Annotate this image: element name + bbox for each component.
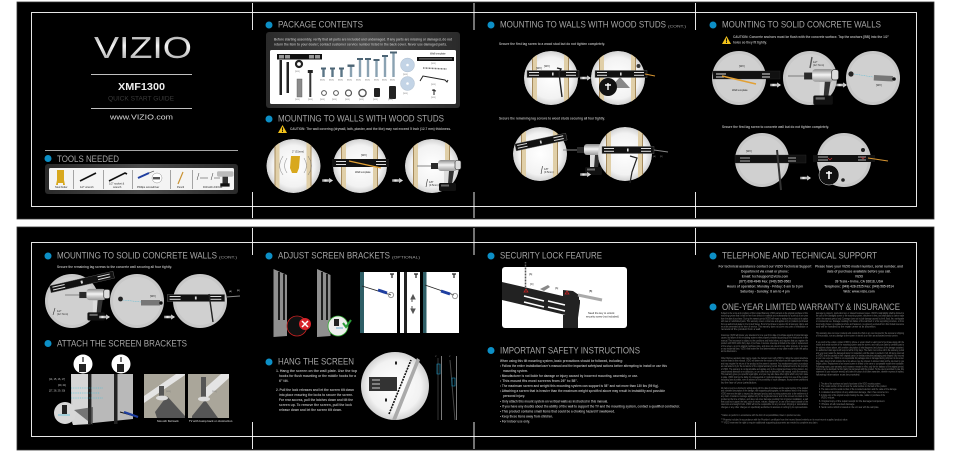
photo: screw bump back: [WX] xyxy=(212,391,217,393)
text: support contact: For technical assistance contact our VIZIO Technical Support xyxy=(719,264,812,268)
cover: model title: QUICK START GUIDE xyxy=(108,96,174,102)
part: wall plate xyxy=(277,54,322,60)
panel: top sheet black background xyxy=(17,2,934,219)
caption: photos: Smooth flat back xyxy=(157,419,179,423)
text: safety list: personal injury. xyxy=(503,394,525,398)
text: warranty left column: product with VIZIO within thirty days of purchase. Insurance coverage is limited to the repair or replacement xyxy=(721,342,808,345)
text: warranty right column: and will be handled by the repair center at its discretion. xyxy=(816,326,876,328)
text: warranty claim list: 8. Serial number which is located on the unit near with the wall plate. xyxy=(819,406,879,409)
heading: concrete cont: MOUNTING TO SOLID CONCRETE WALLS xyxy=(57,251,217,262)
text: support contact: Email: techsupport@vizio.com xyxy=(742,274,788,278)
part labels: [WX] xyxy=(347,80,352,82)
icon: phillips screwdriver xyxy=(138,173,149,178)
parts: spacers xyxy=(374,86,396,99)
text: warranty right column xyxy=(816,312,905,376)
text: warranty footnotes: ** Property included in accordance with the Provider's certificate from the insured based entirely on its most-recent supplied product value. xyxy=(721,418,848,422)
text: warranty left column: with new or refurbished parts. This warranty covers normal use and applies only to products purchased xyxy=(721,320,808,323)
text: support contact xyxy=(719,264,812,294)
text: warranty left column: are warranted only for the remainder of the original warranty period. Parts replaced become the property xyxy=(721,365,809,368)
diagram: security lock: [C] xyxy=(572,295,576,299)
part labels: [WX] xyxy=(356,80,361,82)
part labels: [WX] xyxy=(345,99,350,101)
heading: important safety instructions: IMPORTANT SAFETY INSTRUCTIONS xyxy=(500,346,640,357)
text: hang steps: For rear access, pull the latches down and tilt the xyxy=(279,398,353,402)
text: warranty left column: charges or any other charges not specifically authorized in advance in writing by its representative. xyxy=(721,406,808,409)
text: hang steps: release down and let the screen tilt down. xyxy=(279,408,342,412)
heading: mounting to walls with wood studs cont: (CONT.) xyxy=(668,24,687,28)
instruction: remaining lag screws wood: Secure the remaining lag screws to wood studs securing all four tightly. xyxy=(499,116,605,120)
text: warranty left column: Other: Before a warranty claim can be made, the claimant must notify VIZIO by calling the support telephone xyxy=(721,357,808,360)
step: concrete template: [WX] xyxy=(739,64,745,68)
tool labels: Stud finder xyxy=(55,185,68,189)
arrow xyxy=(99,314,110,320)
text: safety list: mounting system. xyxy=(503,369,528,373)
tool labels: Phillips screwdriver xyxy=(137,185,159,189)
heading: adjust screen brackets: (OPTIONAL) xyxy=(392,255,421,260)
step: locate studs: 2" (51mm) xyxy=(292,150,304,154)
text: warranty left column: and a detailed description of the damage, with supporting photographs, to the address listed in this section. xyxy=(721,390,808,393)
text: support contact: Hours of operation: Monday - Friday: 6 am to 9 pm xyxy=(727,284,803,288)
step: tighten concrete: [A] xyxy=(229,290,232,293)
text: warranty claim list: 4. A detailed description of any additional damage, that it has occurred on. xyxy=(819,391,889,394)
step: first lag screw xyxy=(524,50,579,106)
text: vizio address: Please have your VIZIO model number, serial number, and xyxy=(815,264,903,268)
step: drill remaining concrete: (12.7mm) xyxy=(57,312,68,316)
part labels: [WX] xyxy=(295,71,300,73)
photo: screw flat back xyxy=(144,374,185,418)
text: safety list: • Only attach this mount system on vertical walls as instructed in this manual. xyxy=(500,400,608,404)
step: first lag concrete xyxy=(735,133,806,190)
step: concrete drill: (12.7mm) xyxy=(813,63,824,67)
heading: concrete cont: (CONT.) xyxy=(219,255,238,260)
text: warranty claim list xyxy=(819,382,897,409)
diagram: tilt side view xyxy=(449,356,456,420)
panel: package contents xyxy=(266,32,460,108)
text: hang steps: hooks for flush mounting or the middle hooks for a xyxy=(279,374,356,378)
text: warranty footnotes: * Failure to perform in accordance with the limit of responsibilities; flaws in product service. xyxy=(721,414,801,417)
text: warranty left column: including loss of profits, even if advised of the possibility of such damages, except where prohibited xyxy=(721,379,808,382)
diagram: security lock: Need the key to unlock xyxy=(588,311,615,315)
heading: mounting to walls with wood studs: MOUNTING TO WALLS WITH WOOD STUDS xyxy=(278,114,444,125)
text: warranty left column: manual. This insurance is subject to the conditions and limits below, and requires that you register the xyxy=(721,339,808,342)
text: warranty claim list: 2. The model number of the unit and the serial number on the back of the product. xyxy=(819,385,887,388)
caption: photos xyxy=(157,419,233,423)
diagram: hanging close-up xyxy=(361,352,429,420)
icon: pencil xyxy=(178,172,183,184)
text: warranty right column: the address shown above, with a written description of what happened and photos of the damage sustained. xyxy=(816,346,904,349)
text: warranty right column: to VIZIO shall be packed in their original carton or similar protective packaging and shipped fully insured xyxy=(816,354,904,358)
step: insert anchor 2 xyxy=(110,274,164,328)
text: vizio address xyxy=(815,264,903,294)
panel: tools needed xyxy=(45,164,238,194)
diagram: security lock xyxy=(502,262,627,328)
text: warranty claim list: 3. The name and the serial number of the mounted television and the value of the damage. xyxy=(819,388,897,391)
step: tighten all: [B] xyxy=(660,156,663,158)
tool labels: Drill with drill bits xyxy=(203,185,223,189)
text: warranty left column: of the screen, up to its original purchase price, and does not extend to any other property or persons xyxy=(721,345,809,348)
icon: drill bits xyxy=(197,173,220,180)
tool labels: 1/2" socket & xyxy=(109,182,124,186)
step: first lag screw: [WX] xyxy=(536,66,542,70)
text: warranty claim list: 6. Original copy of the repair receipt for the damaged component. xyxy=(819,400,885,403)
part: lag screw xyxy=(308,70,313,97)
step: wall template: [WX] xyxy=(361,153,367,157)
part: screws strip xyxy=(423,68,447,69)
part labels: [WX] xyxy=(382,80,387,82)
text: warranty left column: of VIZIO. The warranty is not transferable and applies only to the original purchaser of the product. Any xyxy=(721,368,809,371)
step: insert anchor: [WX] xyxy=(876,83,882,87)
text: warranty right column: Claims may be declined if a third party has tampered with the product. To the extent permitted by law, this xyxy=(816,368,905,371)
text: safety list: • The maximum screen and weight this mounting system can support is 58" and not more than 130 lbs (59 Kg). xyxy=(500,384,659,388)
text: vizio address: 39 Tesla • Irvine, CA 92618, USA xyxy=(835,280,884,284)
icon: socket wrench xyxy=(109,173,127,181)
text: warranty right column: statement is your exclusive remedy and takes the place of all other warranties, whether express or implied, xyxy=(816,371,904,374)
part labels: [WX] xyxy=(332,99,337,101)
text: safety list xyxy=(500,359,680,424)
parts: small washers xyxy=(322,89,366,97)
part: wall template xyxy=(417,52,454,61)
text: warranty right column: damage to property, production lost, or related business losses. VIZIO's total liability shall be limited to xyxy=(816,312,904,315)
caution: wall covering: CAUTION: The wall covering (drywall, lath, plaster, and the like) may not exceed 5 Inch (12.7 mm) thickness. xyxy=(290,127,451,131)
step: insert anchor xyxy=(846,51,900,105)
text: warranty left column: from the date of purchase. During the warranty period VIZIO will repair or replace the product at its option xyxy=(721,317,808,320)
tool labels: wrench xyxy=(113,185,122,189)
text: warranty right column: or commercial use. Damage resulting from failure of the wall itself or of its supporting structure, or from xyxy=(816,320,904,323)
part labels: [WX] xyxy=(320,80,325,82)
text: warranty right column: Following repair, your warranty and insurance remain in effect only for the balance of the original period. xyxy=(816,365,904,368)
text: warranty right column: This warranty does not cover products sold outside the USA or any cost incurred for the removal or shipping xyxy=(816,332,904,335)
text: vizio address: Web: www.vizio.com xyxy=(843,290,875,294)
heading: attach the screen brackets: ATTACH THE SCREEN BRACKETS xyxy=(57,338,187,350)
text: warranty left column: All claims must be submitted in writing along with the date of purchase and the serial number of the product xyxy=(721,387,808,390)
text: vizio address: date of purchase available before you call. xyxy=(827,270,891,274)
part: anchor xyxy=(297,79,302,97)
text: warranty left column: that could not support the load, acts of nature, misuse, negligence, or use of the mount outside of the xyxy=(721,400,808,404)
text: warranty claim list: 5. A photo copy of the original receipt showing the date, retailer or purchase of the xyxy=(819,394,885,397)
step: first lag concrete: [WX] xyxy=(746,149,752,153)
cover: website: www.VIZIO.com xyxy=(109,114,173,122)
part labels: [WX] xyxy=(388,99,393,101)
text: warranty right column: An authorized claim agent will respond within thirty days. The claim must arrive within the warranty period xyxy=(816,349,904,352)
step: drill remaining holes xyxy=(513,126,607,182)
diagram: reposition bracket xyxy=(400,272,420,333)
part labels: [WX] xyxy=(359,99,364,101)
text: warranty claim list: 1. The date of the purchase and proof of purchase of the VIZIO mounting system. xyxy=(819,382,881,386)
step: first lag screw: [WX] xyxy=(544,64,550,68)
text: warranty left column: by the law of your jurisdiction. xyxy=(721,381,757,384)
diagram: flush side view: 0" xyxy=(435,356,437,358)
caution: concrete anchors xyxy=(722,35,889,44)
part: washer xyxy=(296,61,302,67)
heading: tools needed: TOOLS NEEDED xyxy=(57,154,119,165)
step: tighten all xyxy=(598,126,668,183)
diagram: remove screw xyxy=(360,272,397,333)
diagram: security lock: [B] xyxy=(589,289,592,293)
text: warranty left column: mounting system that it shall be free from defects in material and workmanship for a period of one year xyxy=(721,315,808,318)
arrow xyxy=(836,82,847,88)
step: drill pilot holes: 1/8" xyxy=(429,180,434,184)
tool labels: Pencil xyxy=(177,185,184,189)
text: support contact: Saturday - Sunday: 8 am to 4 pm xyxy=(740,290,790,294)
part: small key xyxy=(432,89,436,95)
text: support contact: Department via email or phone: xyxy=(741,270,789,274)
text: safety list: • For indoor use only. xyxy=(500,420,530,424)
text: warranty claim list: VIZIO mount. xyxy=(821,396,835,400)
step: drill pilot holes: (3.5mm) xyxy=(429,183,439,187)
arrow xyxy=(580,75,591,81)
text: warranty left column: to state. VIZIO shall not be liable for consequential or incidental damages arising from use of the product xyxy=(721,376,808,379)
part labels: [WX] xyxy=(338,80,343,82)
part: wall template: Wall template xyxy=(430,52,446,56)
part labels: [WX] xyxy=(295,99,300,101)
arrow xyxy=(580,172,591,177)
caution: concrete anchors: holes so they fit tightly. xyxy=(733,40,767,44)
text: warranty left column: or any incidental loss. VIZIO shall make the final determination on any claim made under this policy xyxy=(721,348,809,350)
text: warranty right column: within the warranty period only. Coverage does not include damage caused by theft, flood, fire, earthquake xyxy=(816,317,904,320)
step: tighten concrete xyxy=(167,274,240,328)
cover: VIZIO logo: VIZIO xyxy=(94,30,192,65)
text: warranty right column: Any claim found to fall outside the terms above may be refused. A refused claim will be returned to you xyxy=(816,360,904,363)
arrow xyxy=(770,82,781,88)
cover: model title xyxy=(91,74,192,108)
photo: screw bump back xyxy=(188,374,229,418)
intro text xyxy=(274,38,453,47)
instruction: first lag screw concrete: Secure the first lag screw to concrete wall but do not tighten completely. xyxy=(722,125,829,129)
text: safety list: • If you have any doubts about the ability of the wall to support the TV and the mounting system, contact a qualified contractor. xyxy=(500,404,680,408)
step: level check xyxy=(591,50,655,106)
text: support contact: (877) 698-4946 Fax: (949) 585-9563 xyxy=(739,280,791,284)
text: warranty right column: the cost of the damaged screen or the mounting system, whichever is less, and shall apply to claims made xyxy=(816,315,904,318)
text: safety list: • Manufacturer is not liable for damage or injury caused by incorrect mounting, assembly, or use. xyxy=(500,374,638,378)
text: warranty left column xyxy=(721,312,809,409)
part: screen rails xyxy=(280,60,289,95)
instruction: remaining lag screws concrete: Secure the remaining lag screws to the concrete wall securing all four tightly. xyxy=(57,265,172,269)
step: wall template xyxy=(332,138,389,194)
text: hang steps: 2. Pull the lock releases and let the screen tilt down xyxy=(276,388,354,392)
heading: security lock feature: SECURITY LOCK FEATURE xyxy=(500,251,602,262)
text: warranty left column: number listed in this manual. VIZIO will determine the nature of the failure and the appropriate remedy xyxy=(721,360,809,363)
heading: mounting to walls with wood studs cont: MOUNTING TO WALLS WITH WOOD STUDS xyxy=(500,20,666,30)
diagram: screen back with brackets xyxy=(49,354,138,425)
text: vizio address: VIZIO xyxy=(855,274,864,278)
text: warranty left column: removal of the product from a wall. xyxy=(721,328,761,331)
part labels: [WX] xyxy=(431,97,436,99)
text: warranty left column: rated size and weight limits. VIZIO will not be responsible for any removal, shipping or reinstallation xyxy=(721,403,808,406)
text: warranty left column: at its discretion. xyxy=(721,350,737,353)
icon: 1/2 inch wrench xyxy=(80,173,96,181)
diagram: incorrect bracket position xyxy=(274,269,311,337)
part labels: [WX] xyxy=(403,93,408,95)
step: concrete drill xyxy=(783,51,839,105)
step: locate studs xyxy=(266,138,320,194)
text: warranty right column: freight collect. Replacement of an insured screen is limited to the same or comparable model when available. xyxy=(816,363,904,366)
part labels xyxy=(295,63,436,101)
diagram: correct bracket position xyxy=(317,269,351,337)
text: hang steps: 1. Hang the screen on the wall plate. Use the top xyxy=(276,369,357,373)
diagram: replace screw xyxy=(423,272,459,333)
parts: bolts xyxy=(321,52,397,77)
part labels: [WX] xyxy=(329,80,334,82)
diagram: security lock: security screw (not included) xyxy=(586,314,619,318)
text: warranty footnotes: *** VIZIO reserves the right to require additional supporting documents as needed to complete any claim. xyxy=(721,422,818,424)
step: drill remaining holes: (3.5mm) xyxy=(544,170,554,174)
text: warranty claim list: 7. Photos of all mounted damage. xyxy=(819,403,855,406)
icon: drill xyxy=(217,171,234,187)
text: warranty footnotes xyxy=(721,414,848,424)
icon: stud finder xyxy=(56,170,65,185)
text: warranty left column: Insurance: VIZIO will insure your television for one year from date of purchase against physical damage xyxy=(721,334,808,337)
text: warranty right column: of the product, nor any damage to the screen in transit to or from an authorized service center. xyxy=(816,335,898,338)
text: warranty right column: at your own expense. VIZIO is not responsible for packages lost or damaged during shipment to its center. xyxy=(816,357,904,360)
text: safety list: • This mount fits most screens from 26" to 58". xyxy=(500,379,578,383)
text: warranty left column: from an authorized dealer in the United States. Proof of purchase is required for all warranty claims and xyxy=(721,323,808,326)
text: warranty left column: This warranty gives you specific legal rights, and you may also have other rights which vary from state xyxy=(721,373,808,376)
text: warranty left column: VIZIO reserves the right to inspect the damaged product and mounting system prior to the settlement of xyxy=(721,392,808,395)
arrow xyxy=(164,314,175,320)
parts: large washers xyxy=(400,58,414,90)
text: hang steps: into place ensuring the locks to secure the screen. xyxy=(279,393,353,397)
text: warranty right column: following information must be provided: xyxy=(816,373,860,376)
arrow xyxy=(392,178,403,183)
heading: package contents: PACKAGE CONTENTS xyxy=(278,20,363,30)
heading: telephone and technical support: TELEPHONE AND TECHNICAL SUPPORT xyxy=(722,251,877,262)
part: hanging tool xyxy=(420,76,448,82)
diagram: security lock: [A] xyxy=(529,272,532,276)
arrow xyxy=(800,175,811,181)
part labels: [WX] xyxy=(431,84,436,86)
text: warranty left column: unauthorized alteration or modification, or use other than as directed in this manual, voids the warranty. xyxy=(721,370,808,374)
text: safety list: • Keep these items away from children. xyxy=(500,414,553,418)
step: drill remaining holes: 1/8" xyxy=(544,167,549,171)
text: warranty left column: and may require the return of the product at the owner's expense. Any replacement parts or products xyxy=(721,362,809,365)
heading: mounting to solid concrete walls: MOUNTING TO SOLID CONCRETE WALLS xyxy=(722,20,881,30)
text: safety list: • Follow the entire installation/user's manual and the important safety/and actions before attempting to install or use this xyxy=(500,364,667,368)
part labels: [WX] xyxy=(365,80,370,82)
step: tighten all: [A] xyxy=(653,155,656,158)
text: warranty right column: model and serial number of the mounting system and the screen, and mail your claim by certified post to xyxy=(816,344,904,347)
text: hang steps xyxy=(276,369,357,412)
tool labels: 1/2" wrench xyxy=(80,185,94,189)
text: warranty right column: If you wish to file a claim, contact VIZIO by phone or email. Attach a valid proof of purchase along with the xyxy=(816,341,904,344)
diagram: screen back with brackets: [20, 21] xyxy=(58,384,66,387)
intro text: return the item to your dealer; contact customer service number listed in the back cover. Never use damaged parts. xyxy=(274,43,447,47)
panel: bottom sheet black background xyxy=(17,227,934,450)
text: hang steps: 6" tilt. xyxy=(279,379,289,383)
step: concrete template xyxy=(712,51,780,105)
heading: hang the screen: HANG THE SCREEN xyxy=(278,357,354,368)
part labels: [WX] xyxy=(374,80,379,82)
instruction: first lag screw wood: Secure the first lag screw to a wood stud but do not tighten completely. xyxy=(499,42,605,46)
heading: one-year limited warranty: ONE-YEAR LIMITED WARRANTY & INSURANCE xyxy=(722,302,900,313)
caption: photos: TV with bump back or obstruction xyxy=(189,419,233,423)
step: wall template: Wall template xyxy=(355,170,371,174)
diagram: tilt side view: 6" xyxy=(449,356,451,358)
caution: concrete anchors: CAUTION: Concrete anchors must be flush with the concrete surface. Tap the anchors [BB] into the 1/2" xyxy=(733,35,889,39)
step: concrete template: Wall template xyxy=(732,88,748,92)
step: insert anchor 2: [WX] xyxy=(150,294,156,298)
text: warranty left column: must be presented at the time of service. This warranty does not cover any costs of installation or xyxy=(721,326,808,328)
part labels: [WX] xyxy=(403,74,408,76)
part labels: [WX] xyxy=(390,80,395,82)
arrow xyxy=(322,178,333,183)
step: tighten concrete: [B] xyxy=(237,290,240,292)
text: vizio address: Telephone: (949) 428-2525 Fax: (949) 585-9514 xyxy=(824,284,894,288)
icon: phillips screw inset xyxy=(149,171,162,183)
text: warranty left column: any claim. Insurance coverage applies only to the registered owner and to the screen mounted on the xyxy=(721,395,808,398)
text: warranty left column: caused by failure of this mounting system when properly installed according to the instructions in this xyxy=(721,337,809,340)
caution: wall covering xyxy=(278,125,451,133)
tool labels xyxy=(55,182,223,189)
diagram: security lock: [A] xyxy=(555,286,558,290)
text: safety list: When using this tilt mounting system, basic precautions should be followed, including: xyxy=(500,359,623,363)
part labels: [WX] xyxy=(320,99,325,101)
photo: screw flat back: [WX] xyxy=(166,391,171,393)
step: drill remaining concrete xyxy=(45,271,114,328)
text: safety list: • Attaching a screen that is heavier than the maximum weight specified above may result in instability and possible xyxy=(500,389,665,393)
diagram: screen back with brackets: [14, 15, 16, 17] xyxy=(49,378,65,381)
step: drill remaining concrete: 1/2" xyxy=(57,309,62,313)
step: level concrete xyxy=(813,133,888,187)
text: hang steps: screen up. To remove the screen, pull the lock xyxy=(279,403,352,407)
diagram: screen back with brackets: [27, 28, 29, 30] xyxy=(49,390,65,392)
intro text: Before starting assembly, verify that all parts are included and undamaged. If any parts are missing or damaged, do not xyxy=(274,38,453,42)
step: concrete drill: 1/2" xyxy=(813,60,818,64)
step: drill pilot holes xyxy=(405,138,461,194)
text: safety list: • This product contains small items that could be a choking hazard if swallowed. xyxy=(500,410,615,414)
part labels: [WX] xyxy=(373,99,378,101)
part labels: [WX] xyxy=(431,63,436,65)
text: warranty right column: and you must retain the damaged items for inspection until the claim is settled in full. All items returned xyxy=(816,352,904,355)
text: warranty left column: product at the time of failure, and does not cover damage resulting from improper installation, a wall xyxy=(721,398,808,401)
text: warranty right column: incorrectly chosen or installed anchors and fasteners, is expressly excluded from this limited insurance xyxy=(816,323,904,326)
text: warranty left column: Subject to the terms and conditions of this Limited Warranty, VIZIO warrants to the original purchaser of this xyxy=(721,312,809,315)
cover: model title: XMF1300 xyxy=(118,82,165,93)
part labels: [WX] xyxy=(308,99,313,101)
heading: adjust screen brackets: ADJUST SCREEN BRACKETS xyxy=(278,251,390,262)
diagram: flush side view xyxy=(435,356,442,420)
diagram: security lock: [C] xyxy=(530,282,534,286)
